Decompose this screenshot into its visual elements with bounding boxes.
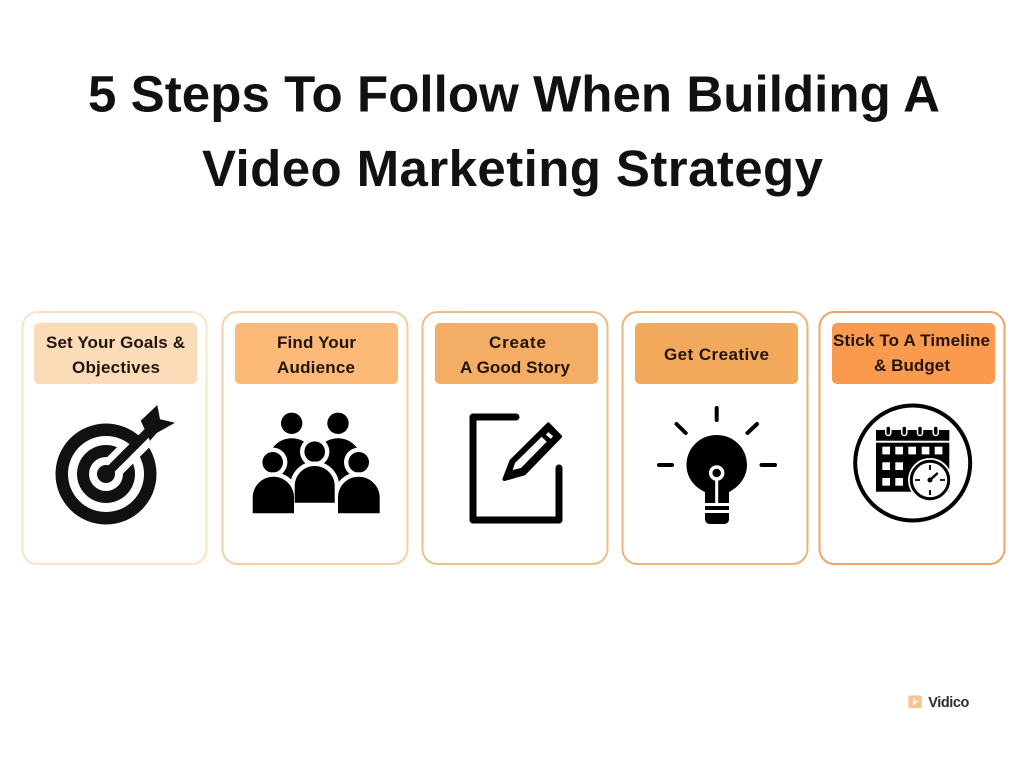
panel: create a good story	[422, 312, 608, 564]
heading: get creative	[635, 323, 798, 384]
heading: set your goals: Objectives	[72, 358, 160, 377]
heading: find your audience: Audience	[277, 358, 355, 377]
heading: set your goals: Set Your Goals &	[46, 333, 185, 352]
icon: document with pencil	[473, 417, 560, 520]
heading: stick to a timeline: & Budget	[874, 356, 950, 375]
icon: logo play mark	[908, 696, 922, 708]
icon: target with arrow	[56, 405, 175, 524]
panel: get creative	[622, 312, 808, 564]
title: 5 Steps To Follow When Building A	[88, 66, 940, 122]
heading: stick to a timeline	[832, 323, 995, 384]
logo: Vidico: Vidico	[928, 695, 969, 711]
icon: light bulb	[659, 408, 775, 524]
heading: find your audience	[235, 323, 398, 384]
heading: create a good story: Create	[489, 333, 546, 352]
title: Video Marketing Strategy	[202, 140, 824, 197]
heading: set your goals	[34, 323, 197, 384]
heading: get creative: Get Creative	[664, 345, 769, 364]
heading: stick to a timeline: Stick To A Timeline	[833, 331, 990, 350]
heading: find your audience: Find Your	[277, 333, 356, 352]
panel: find your audience	[222, 312, 408, 564]
heading: create a good story	[435, 323, 598, 384]
panel: set your goals	[22, 312, 206, 564]
heading: create a good story: A Good Story	[460, 358, 571, 377]
icon: calendar with clock	[855, 406, 970, 520]
title	[88, 66, 940, 197]
logo: Vidico	[908, 695, 969, 711]
icon: group of people	[253, 413, 380, 513]
panel: stick to a timeline	[820, 312, 1004, 564]
